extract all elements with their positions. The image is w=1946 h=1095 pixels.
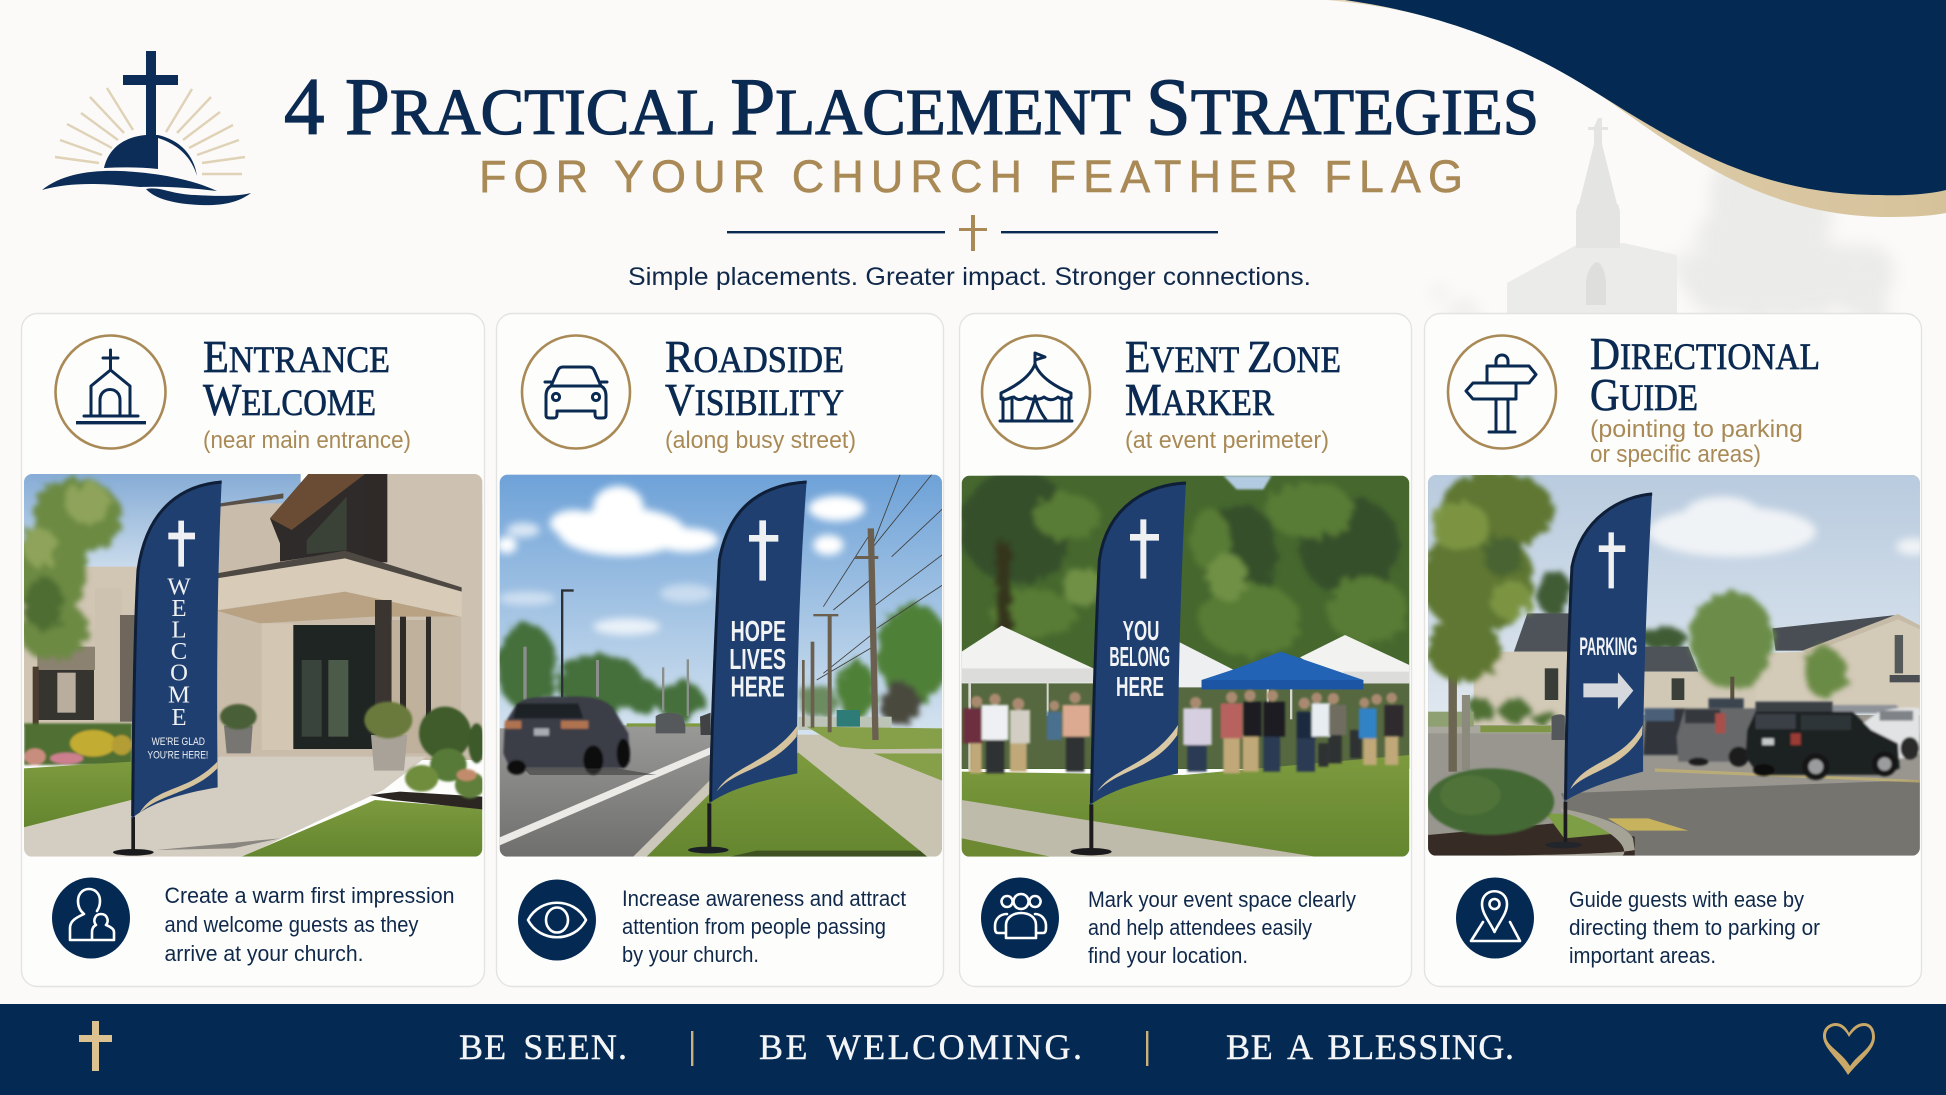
description [1088, 887, 1357, 968]
flag: welcome: W [167, 573, 191, 600]
heading: GUIDE [1590, 369, 1698, 420]
flag: welcome: O [170, 660, 188, 687]
heading: ENTRANCE [203, 331, 390, 382]
description: Increase awareness and attract [622, 886, 907, 911]
slogan: be welcoming: BE WELCOMING. [759, 1027, 1082, 1067]
description: and help attendees easily [1088, 915, 1313, 940]
description: by your church. [622, 942, 759, 967]
description: Create a warm first impression [164, 883, 454, 908]
icon: gold heart [1823, 1023, 1875, 1075]
bottom banner [0, 1004, 1946, 1095]
flag: you belong here: HERE [1116, 671, 1164, 702]
heading [665, 331, 844, 425]
heading [203, 331, 390, 425]
slogan: be seen: BE SEEN. [459, 1027, 627, 1067]
icon: eye [518, 880, 596, 960]
flag: welcome: M [168, 682, 190, 709]
description: attention from people passing [622, 914, 886, 939]
description: find your location. [1088, 943, 1248, 968]
description [1569, 887, 1820, 968]
location note: (along busy street) [665, 427, 856, 454]
ghost church and tree silhouette [1437, 118, 1900, 323]
panel: roadside visibility [496, 314, 950, 986]
icon: people [52, 878, 130, 958]
header wave [1327, 0, 1946, 217]
heading: EVENT ZONE [1125, 331, 1341, 382]
tagline: Simple placements. Greater impact. Stronger connections. [628, 263, 1311, 291]
flag: welcome: WE'RE GLAD [152, 736, 205, 748]
flag: parking [1545, 493, 1652, 848]
flag: welcome: L [171, 616, 187, 643]
icon: car [522, 336, 630, 448]
heading: DIRECTIONAL [1590, 328, 1820, 379]
panel: directional guide [1420, 314, 1930, 986]
car on road [503, 697, 630, 775]
flag: welcome: YOU'RE HERE! [147, 749, 208, 761]
description: arrive at your church. [164, 941, 364, 966]
location note: or specific areas) [1590, 441, 1761, 468]
flag: you belong here: YOU [1123, 615, 1159, 646]
heading: MARKER [1125, 374, 1274, 425]
crowd [963, 690, 1403, 773]
icon: group of people [981, 878, 1059, 958]
flag: hope lives here [688, 481, 807, 853]
location note [1590, 416, 1803, 468]
description: and welcome guests as they [164, 912, 419, 937]
flag: hope lives here: HERE [731, 672, 785, 704]
flag: welcome [113, 481, 222, 856]
photo: event tents and crowd [960, 470, 1409, 857]
icon: gold cross [79, 1021, 112, 1071]
heading: WELCOME [203, 374, 376, 425]
parked cars [1643, 698, 1920, 780]
title: 4 PRACTICAL PLACEMENT STRATEGIES [284, 61, 1539, 152]
photo: church entrance with welcome flag [13, 474, 485, 857]
description: Mark your event space clearly [1088, 887, 1357, 912]
location note: (at event perimeter) [1125, 427, 1329, 454]
slogan: be a blessing: BE A BLESSING. [1226, 1027, 1514, 1067]
title divider with cross [727, 215, 1218, 251]
flag: hope lives here: LIVES [729, 644, 786, 676]
flag: hope lives here: HOPE [731, 616, 786, 648]
icon: signpost [1448, 336, 1556, 448]
description: Guide guests with ease by [1569, 887, 1805, 912]
logo: cross over sunrise and waves [42, 51, 251, 205]
description [622, 886, 907, 967]
description [164, 883, 454, 966]
photo: parking lot flag [1420, 472, 1930, 856]
photo: roadside flag [497, 475, 950, 857]
description: important areas. [1569, 943, 1716, 968]
subtitle: FOR YOUR CHURCH FEATHER FLAG [479, 151, 1463, 202]
flag: welcome: E [171, 704, 187, 731]
panel: event zone marker [960, 314, 1412, 986]
flag: welcome: E [171, 595, 187, 622]
heading: ROADSIDE [665, 331, 844, 382]
flag: welcome: C [171, 638, 187, 665]
panel: entrance welcome [13, 314, 485, 986]
flag: you belong here: BELONG [1109, 641, 1170, 672]
heading [1590, 328, 1820, 420]
icon: tent [982, 336, 1090, 448]
flag: parking: PARKING [1579, 634, 1637, 661]
location note: (pointing to parking [1590, 416, 1803, 443]
location note: (near main entrance) [203, 427, 411, 454]
heading: VISIBILITY [665, 374, 844, 425]
icon: map pin [1456, 878, 1534, 958]
description: directing them to parking or [1569, 915, 1820, 940]
flag: you belong here [1070, 482, 1186, 855]
heading [1125, 331, 1341, 425]
icon: church [56, 336, 166, 448]
